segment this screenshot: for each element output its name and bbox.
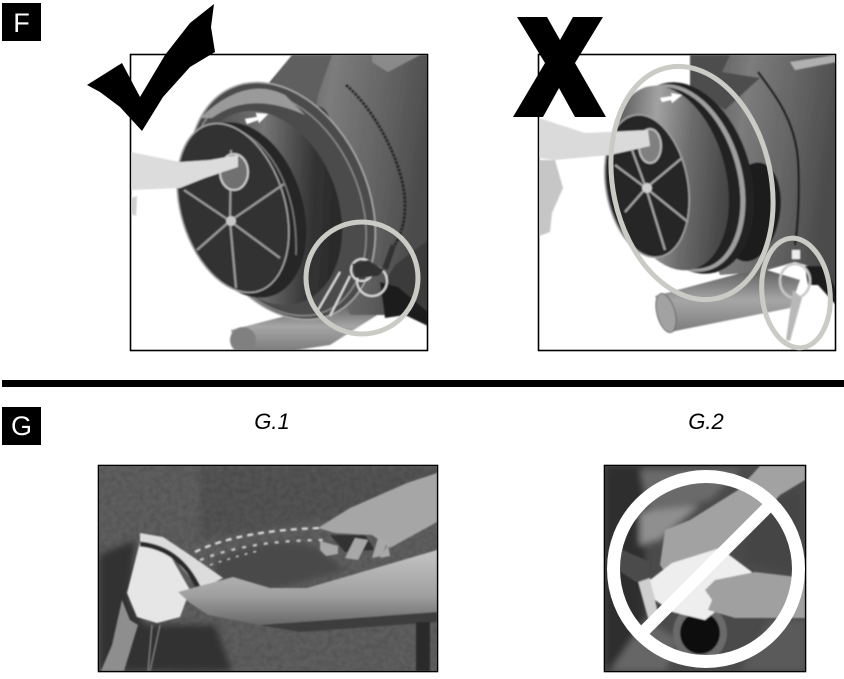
finger and hand <box>539 118 650 160</box>
section badge G <box>2 407 41 445</box>
shadow below arm <box>264 612 437 632</box>
draining water <box>101 600 138 671</box>
upper arm and hand on hose <box>318 473 437 548</box>
panel: incorrect installation photo <box>538 54 836 350</box>
filter wheel <box>603 114 691 259</box>
dark shadow behind drum <box>736 162 782 262</box>
pin clip and ring <box>318 259 387 316</box>
white cloth <box>650 548 752 620</box>
white direction arrow <box>660 93 682 103</box>
photo: rinsing filter with hose <box>98 466 438 672</box>
upper arm and hand <box>660 466 805 582</box>
caption G.2: G.2 <box>688 409 724 434</box>
section badge F <box>2 3 41 41</box>
outer rim <box>193 80 377 320</box>
highlight oval on pin <box>756 235 836 351</box>
lanyard cord <box>758 72 799 245</box>
highlight oval on drum <box>590 51 794 315</box>
lanyard cord <box>346 85 405 245</box>
white direction arrow <box>245 113 268 124</box>
blower body <box>268 55 428 326</box>
fingers <box>320 538 390 560</box>
drain <box>672 612 728 655</box>
pin bracket <box>380 282 428 326</box>
section badge G: G <box>11 411 32 441</box>
mounting tube <box>230 306 378 350</box>
finger <box>131 152 238 190</box>
prohibition sign <box>614 476 798 662</box>
sink background <box>605 466 645 671</box>
running water <box>637 577 658 619</box>
faucet <box>618 548 650 582</box>
section badge F: F <box>13 8 30 38</box>
water stream <box>195 528 322 552</box>
hose nozzle <box>330 535 375 552</box>
highlight circle on pin <box>306 222 418 334</box>
panel: correct installation photo <box>130 53 428 353</box>
mounting tube <box>655 268 800 332</box>
filter wheel <box>176 122 291 294</box>
rear rim and drum <box>658 81 750 275</box>
cross mark <box>513 17 606 117</box>
lower hand <box>705 572 805 618</box>
blower body <box>690 55 836 300</box>
bracket <box>805 266 836 305</box>
caption G.1: G.1 <box>254 409 290 434</box>
table leg <box>416 622 430 671</box>
drum <box>221 110 342 304</box>
dangling pin and ring <box>792 250 800 259</box>
dark filter band <box>140 544 199 589</box>
filter flap <box>140 533 223 590</box>
photo: washing filter in sink (not allowed) <box>604 466 806 672</box>
section divider <box>2 380 844 387</box>
check mark <box>87 4 215 131</box>
right arm and lower hand <box>178 550 437 625</box>
filter cone <box>127 542 190 623</box>
dark ground area <box>99 540 232 671</box>
